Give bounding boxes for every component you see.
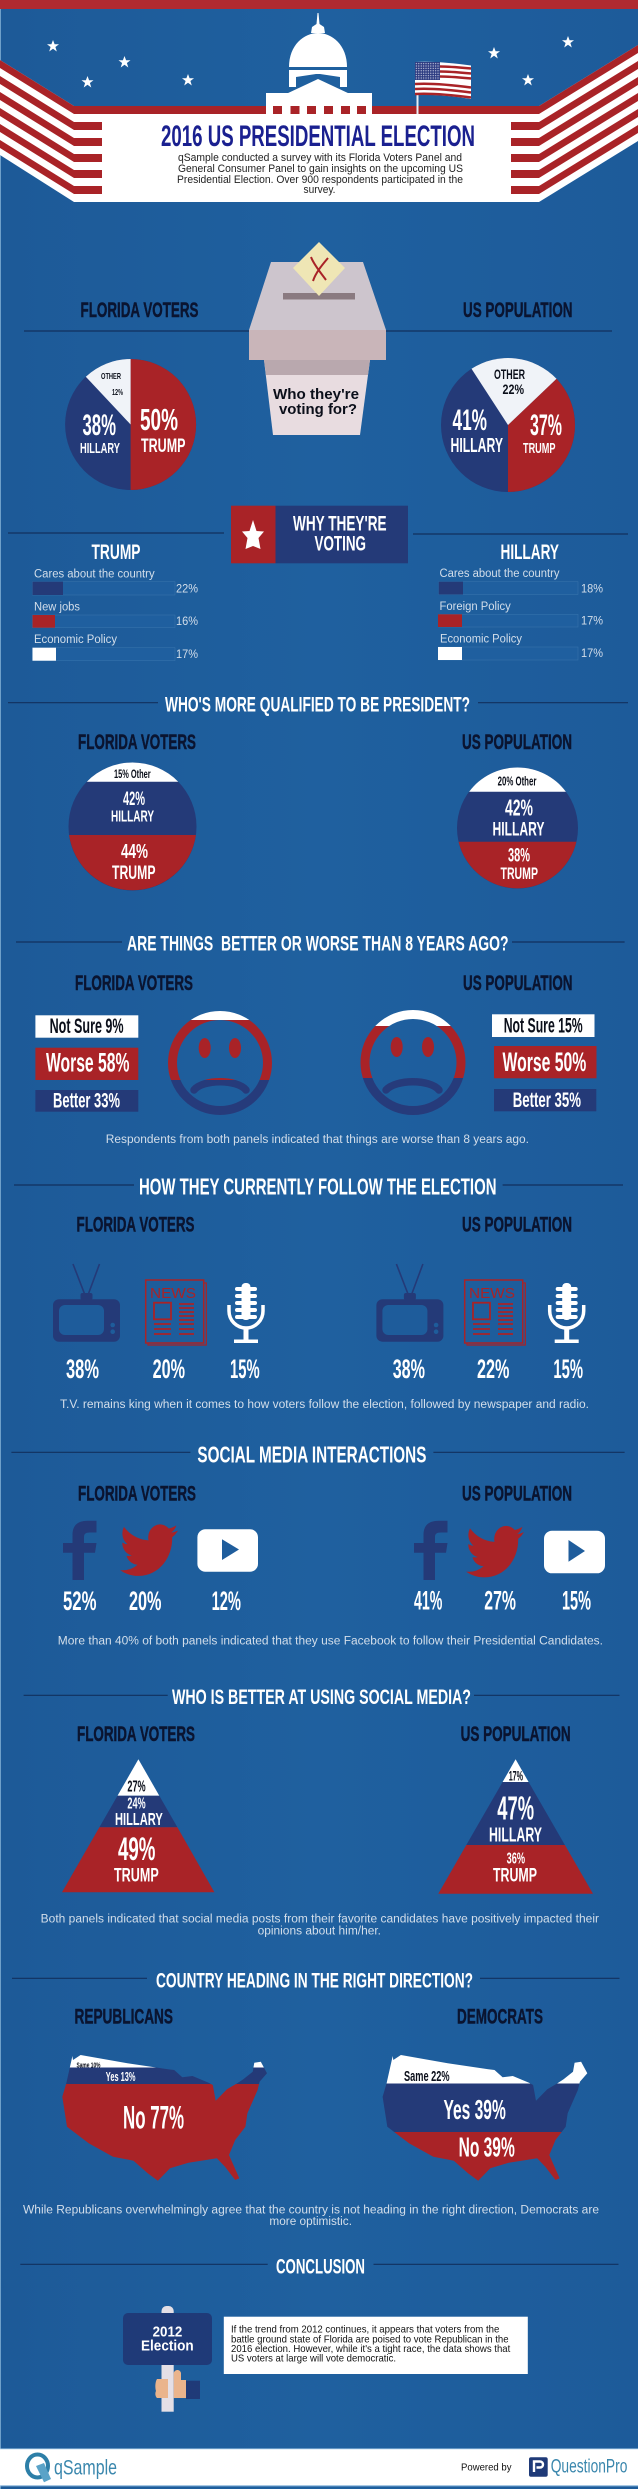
panel: who they're voting for bbox=[24, 242, 612, 492]
intro text: General Consumer Panel to gain insights on the upcoming US bbox=[178, 163, 463, 175]
chart: us pyramid bbox=[438, 1759, 593, 1894]
pie chart: florida voters: 12% bbox=[112, 388, 123, 397]
column: hillary reasons: 18% bbox=[581, 584, 603, 596]
section line right bbox=[503, 1184, 623, 1186]
pie chart: florida voters: HILLARY bbox=[80, 440, 120, 457]
chart: florida qualified circle bbox=[68, 762, 196, 890]
panel: country heading bbox=[12, 1968, 620, 2228]
icon: sad face florida bbox=[172, 1016, 268, 1110]
icon: hand holding sign: Election bbox=[141, 2339, 194, 2355]
logo: qsample: qSample bbox=[54, 2456, 117, 2479]
icon: facebook us bbox=[414, 1521, 448, 1580]
intro text bbox=[177, 152, 463, 196]
legend: florida: Worse 58% bbox=[46, 1048, 129, 1078]
heading: social media interactions: SOCIAL MEDIA INTERACTIONS bbox=[197, 1441, 426, 1467]
caption bbox=[41, 1914, 599, 1937]
caption: Both panels indicated that social media posts from their favorite candidates have positively impacted their bbox=[41, 1914, 599, 1926]
section line left bbox=[12, 1977, 147, 1979]
stats: florida media: 38% bbox=[66, 1354, 99, 1384]
callout: conclusion text: battle ground state of Florida are poised to vote Republican in the bbox=[231, 2334, 509, 2345]
icon: sad face us bbox=[365, 1014, 461, 1110]
panel: why they're voting bbox=[8, 506, 628, 661]
stats: us social: 41% bbox=[414, 1586, 442, 1616]
panel: better or worse bbox=[16, 932, 625, 1146]
heading: us population: US POPULATION bbox=[461, 1723, 571, 1746]
icon: newspaper florida: NEWS bbox=[150, 1285, 196, 1302]
pie chart: us population: 37% bbox=[530, 409, 562, 442]
heading: us population: US POPULATION bbox=[463, 299, 572, 322]
pie chart: florida voters: 38% bbox=[82, 409, 116, 442]
icon: twitter florida bbox=[120, 1524, 178, 1576]
panel: header bbox=[0, 0, 638, 202]
chart: us qualified circle: 42% bbox=[505, 795, 533, 821]
column: hillary reasons: 17% bbox=[581, 616, 603, 628]
stats: us social: 15% bbox=[562, 1586, 591, 1616]
white banner with chevrons bbox=[0, 45, 638, 202]
pie chart: florida voters: OTHER bbox=[101, 371, 121, 381]
stats: us social: 27% bbox=[484, 1586, 516, 1616]
intro text: Presidential Election. Over 900 respondents participated in the bbox=[177, 174, 463, 186]
heading: florida voters: FLORIDA VOTERS bbox=[76, 1214, 194, 1237]
panel: how they follow the election bbox=[14, 1173, 623, 1411]
column: trump reasons: 22% bbox=[176, 584, 198, 596]
chart: florida pyramid: HILLARY bbox=[115, 1809, 163, 1829]
chart: us pyramid: 36% bbox=[507, 1850, 525, 1867]
icon: microphone florida bbox=[229, 1283, 263, 1343]
stats: florida media bbox=[66, 1354, 260, 1384]
map: democrats bbox=[383, 2055, 587, 2181]
heading: us population: US POPULATION bbox=[462, 1214, 572, 1237]
caption: opinions about him/her. bbox=[258, 1925, 381, 1937]
caption: T.V. remains king when it comes to how voters follow the election, followed by newspaper and radio. bbox=[60, 1399, 589, 1411]
heading: us population: US POPULATION bbox=[462, 1483, 572, 1506]
icon: youtube us bbox=[544, 1531, 605, 1573]
caption bbox=[23, 2204, 599, 2228]
column: hillary reasons: Economic Policy bbox=[440, 634, 522, 646]
column: trump reasons: New jobs bbox=[34, 602, 80, 614]
map: democrats: No 39% bbox=[459, 2132, 515, 2163]
map: republicans: Yes 13% bbox=[106, 2069, 136, 2084]
banner: why they're voting: WHY THEY'RE bbox=[293, 512, 387, 536]
chart: florida pyramid: 49% bbox=[118, 1831, 155, 1867]
stats: us media: 15% bbox=[553, 1354, 583, 1384]
column: hillary reasons bbox=[438, 541, 603, 660]
section line right bbox=[512, 941, 625, 943]
section line left bbox=[8, 702, 158, 704]
map: republicans bbox=[62, 2055, 267, 2181]
callout: conclusion text: 2016 election. However, while it's a tight race, the data shows that bbox=[231, 2344, 510, 2355]
pie chart: us population: OTHER bbox=[494, 367, 525, 382]
heading: florida voters: FLORIDA VOTERS bbox=[78, 731, 196, 754]
intro text: survey. bbox=[304, 184, 336, 196]
section line right bbox=[474, 1694, 620, 1696]
icon: american flag bbox=[415, 62, 471, 114]
column: trump reasons: Economic Policy bbox=[34, 634, 117, 646]
chart: florida qualified circle: 44% bbox=[121, 841, 148, 863]
section line right bbox=[433, 1451, 625, 1453]
stats: florida social: 20% bbox=[129, 1586, 162, 1616]
stats: florida media: 15% bbox=[230, 1354, 260, 1384]
section line left bbox=[20, 2263, 268, 2265]
divider left bbox=[24, 330, 250, 332]
icon: ballot box: Who they're bbox=[273, 386, 359, 403]
heading: us population: US POPULATION bbox=[462, 731, 572, 754]
legend: us bbox=[492, 1014, 596, 1112]
callout: conclusion text: US voters at large will vote democratic. bbox=[231, 2354, 396, 2365]
chart: florida qualified circle: TRUMP bbox=[112, 863, 156, 884]
icon: ballot box: voting for? bbox=[279, 401, 357, 418]
stats: us media: 38% bbox=[393, 1354, 425, 1384]
footer bbox=[0, 2448, 638, 2486]
pie chart: florida voters: TRUMP bbox=[141, 436, 186, 457]
section line left bbox=[16, 941, 122, 943]
panel: who's more qualified bbox=[8, 694, 628, 890]
chart: florida pyramid bbox=[62, 1759, 214, 1892]
column: trump reasons: 16% bbox=[176, 616, 198, 628]
chart: florida pyramid: 27% bbox=[127, 1779, 146, 1796]
heading: conclusion: CONCLUSION bbox=[276, 2254, 365, 2278]
heading: democrats: DEMOCRATS bbox=[457, 2004, 543, 2028]
column: trump reasons: TRUMP bbox=[92, 541, 140, 564]
powered by: Powered by bbox=[461, 2462, 512, 2474]
stats: florida social: 12% bbox=[212, 1586, 241, 1616]
pie chart: us population: TRUMP bbox=[523, 440, 556, 457]
chart: florida qualified circle: 15% Other bbox=[114, 767, 151, 781]
caption: Respondents from both panels indicated that things are worse than 8 years ago. bbox=[106, 1134, 529, 1146]
column: trump reasons bbox=[32, 541, 198, 661]
map: republicans: Same 10% bbox=[76, 2060, 101, 2069]
heading: us population: US POPULATION bbox=[463, 971, 572, 995]
chart: us qualified circle: TRUMP bbox=[500, 864, 538, 883]
stats: florida media: 20% bbox=[153, 1354, 185, 1384]
chart: florida qualified circle: 42% bbox=[123, 789, 145, 810]
pie chart: us population: HILLARY bbox=[450, 435, 503, 457]
panel: who is better at social media bbox=[24, 1685, 620, 1937]
icon: newspaper us: NEWS bbox=[469, 1285, 515, 1302]
stats: florida social: 52% bbox=[63, 1586, 96, 1616]
legend: florida: Better 33% bbox=[53, 1090, 120, 1112]
chart: us pyramid: 17% bbox=[509, 1768, 523, 1784]
heading: country heading: COUNTRY HEADING IN THE RIGHT DIRECTION? bbox=[156, 1968, 473, 1992]
section line right bbox=[478, 702, 628, 704]
icon: capitol building bbox=[266, 13, 372, 114]
chart: florida pyramid: TRUMP bbox=[114, 1865, 159, 1887]
chart: us qualified circle bbox=[457, 768, 578, 888]
icon: newspaper us bbox=[465, 1280, 525, 1345]
section line left bbox=[14, 1184, 134, 1186]
banner: why they're voting: VOTING bbox=[314, 532, 366, 556]
column: trump reasons: 17% bbox=[176, 649, 198, 661]
icon: twitter us bbox=[466, 1526, 524, 1577]
stats: us media bbox=[393, 1354, 583, 1384]
column: hillary reasons: 17% bbox=[581, 648, 603, 660]
logo: qsample bbox=[27, 2454, 117, 2482]
section line right bbox=[480, 1977, 620, 1979]
pie chart: florida voters bbox=[65, 359, 196, 490]
callout: conclusion text: If the trend from 2012 continues, it appears that voters from the bbox=[231, 2325, 500, 2336]
pie chart: us population: 22% bbox=[502, 381, 524, 397]
panel: conclusion bbox=[20, 2254, 619, 2412]
section line right bbox=[374, 2263, 618, 2265]
legend: us: Better 35% bbox=[513, 1089, 581, 1112]
stats: us media: 22% bbox=[477, 1354, 509, 1384]
chart: florida pyramid: 24% bbox=[127, 1795, 146, 1812]
icon: tv us bbox=[376, 1264, 443, 1342]
intro text: qSample conducted a survey with its Florida Voters Panel and bbox=[178, 152, 462, 164]
chart: us qualified circle: 38% bbox=[508, 846, 530, 867]
stats: us social bbox=[414, 1586, 591, 1616]
divider left bbox=[8, 532, 224, 534]
panel: social media interactions bbox=[11, 1441, 625, 1647]
legend: florida bbox=[35, 1015, 138, 1112]
heading: who is better: WHO IS BETTER AT USING SOCIAL MEDIA? bbox=[172, 1685, 471, 1709]
icon: microphone us bbox=[550, 1283, 584, 1343]
icon: youtube florida bbox=[197, 1529, 258, 1572]
heading: florida voters: FLORIDA VOTERS bbox=[80, 299, 198, 322]
section line left bbox=[11, 1451, 190, 1453]
map: republicans: No 77% bbox=[123, 2099, 184, 2135]
chart: us qualified circle: HILLARY bbox=[492, 819, 544, 841]
icon: newspaper florida bbox=[146, 1280, 206, 1345]
caption: While Republicans overwhelmingly agree that the country is not heading in the right direction, Democrats are bbox=[23, 2204, 599, 2216]
icon: facebook florida bbox=[63, 1521, 96, 1580]
icon: ballot box bbox=[249, 242, 386, 435]
chart: us qualified circle: 20% Other bbox=[498, 774, 536, 789]
chart: florida qualified circle: HILLARY bbox=[111, 809, 154, 826]
column: hillary reasons: Foreign Policy bbox=[440, 601, 511, 613]
stats: florida social bbox=[63, 1586, 241, 1616]
icon: hand holding sign: 2012 bbox=[153, 2325, 182, 2341]
divider right bbox=[413, 533, 628, 535]
heading: florida voters: FLORIDA VOTERS bbox=[78, 1483, 196, 1506]
top red band bbox=[0, 0, 638, 9]
callout: conclusion text bbox=[224, 2317, 528, 2374]
heading: republicans: REPUBLICANS bbox=[74, 2004, 173, 2028]
chart: us pyramid: HILLARY bbox=[489, 1824, 542, 1847]
map: democrats: Yes 39% bbox=[444, 2094, 506, 2125]
pie chart: us population: 41% bbox=[452, 404, 487, 437]
heading: florida voters: FLORIDA VOTERS bbox=[77, 1723, 195, 1746]
divider right bbox=[386, 330, 612, 332]
chart: us pyramid: TRUMP bbox=[493, 1865, 537, 1887]
caption: more optimistic. bbox=[269, 2216, 352, 2228]
pie chart: florida voters: 50% bbox=[140, 402, 178, 437]
column: hillary reasons: Cares about the country bbox=[440, 568, 560, 580]
heading: who's more qualified: WHO'S MORE QUALIFIED TO BE PRESIDENT? bbox=[165, 694, 470, 717]
legend: us: Not Sure 15% bbox=[504, 1014, 583, 1038]
stars bbox=[47, 36, 574, 88]
map: democrats: Same 22% bbox=[404, 2068, 450, 2085]
icon: hand holding sign bbox=[123, 2306, 212, 2412]
legend: florida: Not Sure 9% bbox=[50, 1015, 124, 1038]
section line left bbox=[24, 1694, 168, 1696]
icon: tv florida bbox=[53, 1264, 120, 1342]
caption: More than 40% of both panels indicated that they use Facebook to follow their Presidential Candidates. bbox=[58, 1635, 603, 1647]
banner: why they're voting bbox=[231, 506, 408, 563]
column: trump reasons: Cares about the country bbox=[34, 569, 155, 581]
heading: florida voters: FLORIDA VOTERS bbox=[75, 971, 193, 995]
pie chart: us population bbox=[441, 358, 575, 492]
chart: us pyramid: 47% bbox=[497, 1789, 534, 1826]
column: hillary reasons: HILLARY bbox=[500, 541, 559, 564]
